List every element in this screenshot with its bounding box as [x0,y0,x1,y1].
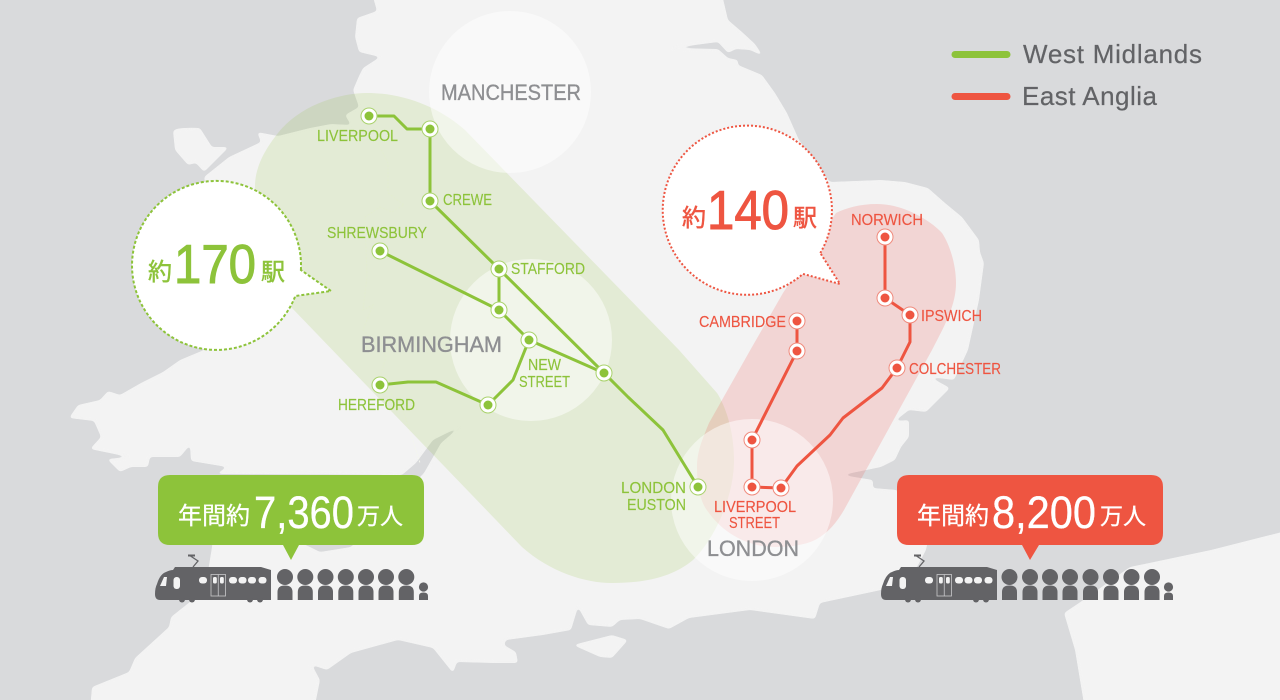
region: West Midlands area [254,93,734,583]
land: Great Britain [69,0,984,700]
city circle: London [671,419,833,581]
East Anglia station labels [699,212,1001,532]
city circle: Manchester [429,11,591,173]
ridership box: West Midlands: 万人 [357,497,403,531]
ridership box: East Anglia: 年間約 [917,496,989,531]
West Midlands station labels: LONDON [621,480,686,497]
West Midlands station labels: STAFFORD [511,261,585,278]
legend: East Anglia [1022,81,1158,111]
ridership box: East Anglia: 8,200 [992,487,1096,538]
East Anglia station labels: NORWICH [851,212,923,229]
ridership box: West Midlands: 7,360 [254,487,354,538]
callout: about 170 stations: 駅 [261,252,285,287]
ridership box: West Midlands [158,475,424,560]
land: Anglesey [173,128,229,172]
callout: about 140 stations: 駅 [793,198,817,233]
East Anglia stations [744,229,918,496]
callout: about 170 stations: 170 [174,233,256,295]
West Midlands station labels: SHREWSBURY [327,225,427,242]
ridership box: East Anglia: 万人 [1100,497,1146,531]
East Anglia station labels: CAMBRIDGE [699,314,786,331]
city circle: Birmingham [450,259,612,421]
West Midlands station labels: EUSTON [627,497,686,514]
West Midlands station labels: NEW [528,357,562,374]
city label: London: LONDON [707,536,799,561]
land: Isle of Wight [573,635,628,658]
East Anglia station labels: COLCHESTER [909,361,1001,378]
legend [955,39,1202,111]
West Midlands station labels: LIVERPOOL [317,128,398,145]
legend: West Midlands [1023,39,1202,69]
West Midlands station labels: CREWE [443,192,492,209]
city label: Birmingham: BIRMINGHAM [361,332,502,357]
West Midlands route network [369,116,698,487]
callout: about 170 stations [132,181,331,350]
West Midlands station labels: STREET [519,374,570,391]
East Anglia station labels: STREET [729,515,780,532]
land: continental Europe [1064,530,1280,700]
county boundary [363,143,420,463]
West Midlands station labels: HEREFORD [338,397,415,414]
icon: people East Anglia [1002,569,1173,600]
callout: about 140 stations: 140 [707,179,789,241]
city label: Manchester: MANCHESTER [441,80,581,105]
West Midlands stations [361,108,706,495]
ridership box: East Anglia [897,475,1163,560]
region: East Anglia area [697,204,956,547]
icon: train West Midlands [155,555,271,602]
East Anglia station labels: LIVERPOOL [714,499,796,516]
West Midlands station labels [317,128,686,514]
East Anglia station labels: IPSWICH [921,308,982,325]
icon: train East Anglia [881,555,997,602]
callout: about 140 stations [663,126,840,295]
callout: about 140 stations: 約 [682,198,706,233]
ridership box: West Midlands: 年間約 [178,496,250,531]
East Anglia route network [752,237,910,488]
icon: people West Midlands [277,569,428,600]
callout: about 170 stations: 約 [148,252,172,287]
